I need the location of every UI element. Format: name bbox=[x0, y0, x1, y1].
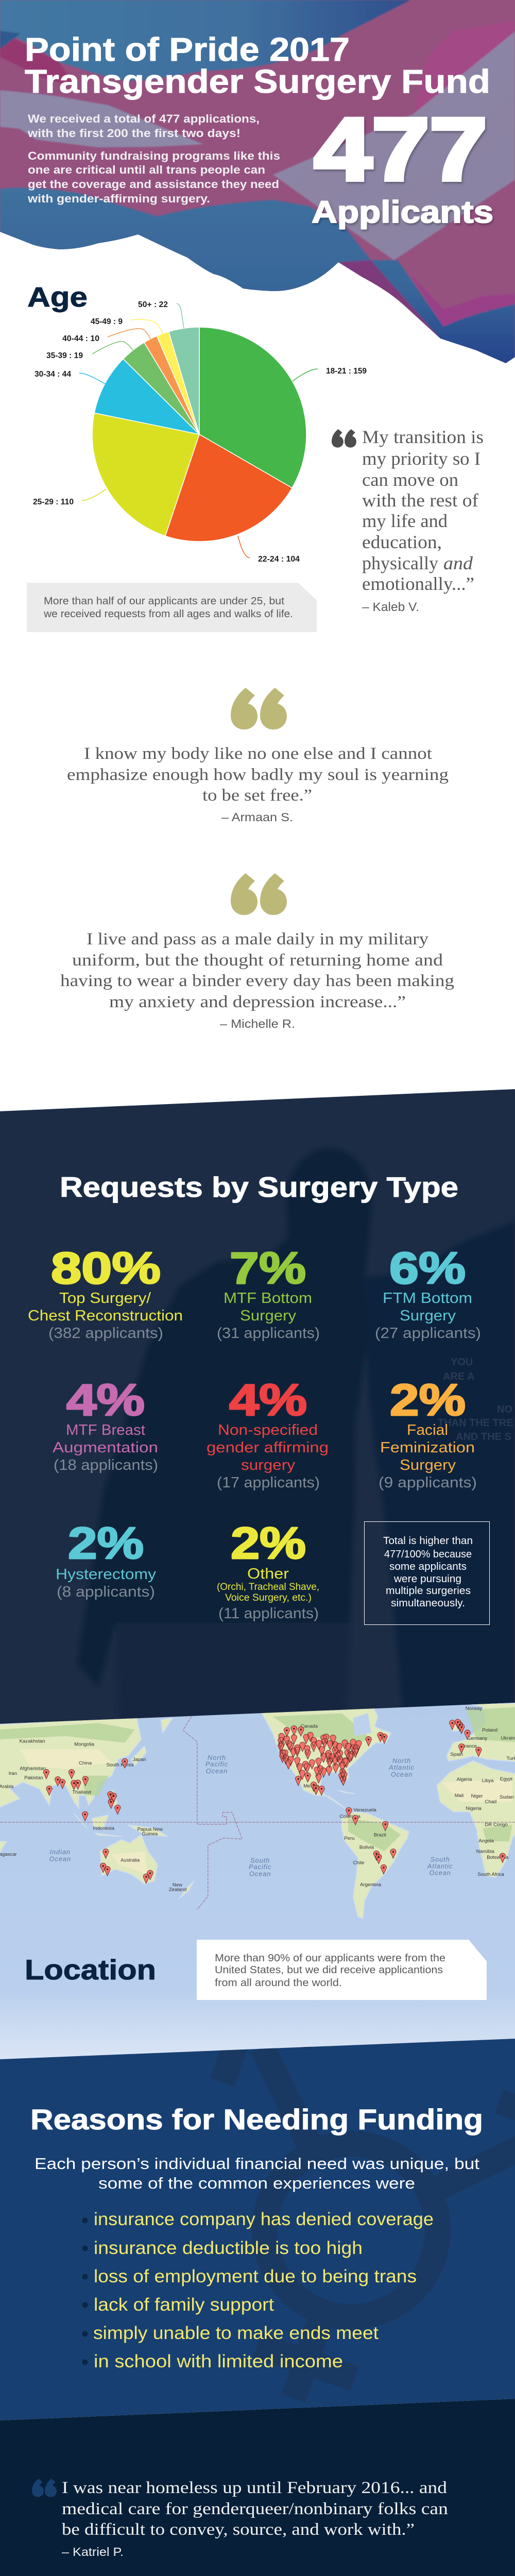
map: applicant locations: Zealand bbox=[169, 1887, 186, 1892]
quote: Katriel P.: I was near homeless up until February 2016... and bbox=[62, 2479, 448, 2497]
stat: MTF breast augmentation 4% bbox=[53, 1376, 158, 1473]
stat: other 2% bbox=[217, 1519, 319, 1622]
quote: Kaleb V.: physically bbox=[362, 553, 438, 573]
quote: Kaleb V. bbox=[362, 427, 484, 614]
list: reasons: in school with limited income bbox=[94, 2351, 343, 2371]
map: applicant locations: Algeria bbox=[457, 1777, 472, 1783]
map: applicant locations: Chile bbox=[353, 1860, 364, 1866]
callout: total note: multiple surgeries bbox=[386, 1585, 471, 1597]
icon: quote mark tan bbox=[231, 873, 287, 915]
list: reasons: lack of family support bbox=[94, 2295, 274, 2315]
stat: MTF breast augmentation 4%: (18 applicants) bbox=[54, 1457, 158, 1473]
stat: hysterectomy 2% bbox=[56, 1519, 157, 1600]
map: applicant locations: Pacific bbox=[249, 1863, 271, 1871]
pie chart: age distribution bbox=[33, 300, 367, 564]
quote: Kaleb V.: can move on bbox=[362, 469, 458, 490]
map: applicant locations: Japan bbox=[133, 1757, 146, 1762]
quote: Katriel P.: – Katriel P. bbox=[62, 2545, 124, 2558]
quote: Kaleb V.: emotionally...” bbox=[362, 573, 474, 594]
map: applicant locations: South bbox=[431, 1856, 450, 1863]
intro text: We received a total of 477 applications, bbox=[28, 112, 260, 125]
stat: MTF bottom surgery 7%: Surgery bbox=[240, 1308, 297, 1324]
map: applicant locations: Indian bbox=[49, 1848, 71, 1856]
map: applicant locations: South Africa bbox=[477, 1872, 505, 1877]
pie chart: age distribution: 40-44 : 10 bbox=[62, 334, 99, 343]
t-shirt print: AND THE S bbox=[456, 1431, 511, 1443]
map: applicant locations: North bbox=[392, 1757, 411, 1765]
stat: facial feminization surgery 2% bbox=[379, 1376, 477, 1491]
map: applicant locations: Germany bbox=[467, 1736, 487, 1741]
stat: MTF breast augmentation 4%: Augmentation bbox=[53, 1439, 158, 1456]
map: applicant locations: Mali bbox=[455, 1793, 464, 1799]
quote: Michelle R.: – Michelle R. bbox=[220, 1017, 295, 1030]
map: applicant locations: Pacific bbox=[205, 1760, 228, 1768]
heading: reasons for needing funding: Reasons for Needing Funding bbox=[30, 2103, 483, 2136]
stat: non-specified surgery 4%: gender affirming bbox=[207, 1439, 329, 1456]
map: applicant locations: Sudan bbox=[500, 1794, 514, 1800]
map: applicant locations: Pakistan bbox=[24, 1775, 43, 1781]
stat: FTM bottom surgery 6%: (27 applicants) bbox=[375, 1325, 481, 1342]
stat: FTM bottom surgery 6%: 6% bbox=[389, 1244, 466, 1293]
stat: hysterectomy 2%: Hysterectomy bbox=[56, 1566, 157, 1583]
map: applicant locations: Mongolia bbox=[74, 1741, 95, 1747]
stat: facial feminization surgery 2%: 2% bbox=[390, 1376, 466, 1425]
title: Transgender Surgery Fund bbox=[25, 63, 490, 100]
map: applicant locations: Peru bbox=[344, 1836, 355, 1841]
map: applicant locations: Poland bbox=[482, 1727, 497, 1733]
callout: age note: More than half of our applicants are under 25, but bbox=[44, 596, 284, 607]
quote: Michelle R.: uniform, but the thought of returning home and bbox=[72, 951, 443, 970]
t-shirt print bbox=[438, 1357, 513, 1443]
map: applicant locations: Guinea bbox=[142, 1832, 158, 1837]
quote: Katriel P. bbox=[62, 2479, 448, 2558]
map: applicant locations: Norway bbox=[466, 1706, 482, 1711]
map: applicant locations: South Korea bbox=[107, 1762, 134, 1768]
panel background: testimonials dark bbox=[0, 2399, 515, 2576]
intro text: with gender-affirming surgery. bbox=[27, 192, 210, 205]
text: reasons intro: some of the common experiences were bbox=[98, 2174, 415, 2192]
callout: total note: Total is higher than bbox=[383, 1535, 473, 1547]
list: reasons: insurance deductible is too high bbox=[94, 2238, 363, 2258]
t-shirt print: NO bbox=[497, 1404, 512, 1415]
pie chart: age distribution: 35-39 : 19 bbox=[46, 351, 83, 360]
map: applicant locations bbox=[0, 1700, 515, 2061]
map: applicant locations: China bbox=[79, 1760, 92, 1766]
callout: location note: United States, but we did receive applicantions bbox=[215, 1964, 443, 1976]
pie chart: age distribution: 22-24 : 104 bbox=[258, 555, 300, 564]
big number: 477 applicants: Applicants bbox=[312, 195, 493, 229]
stat: facial feminization surgery 2%: Feminization bbox=[380, 1439, 475, 1456]
intro text: get the coverage and assistance they need bbox=[28, 178, 279, 191]
quote: Armaan S.: – Armaan S. bbox=[221, 810, 293, 824]
title bbox=[25, 31, 490, 100]
quote: Armaan S.: I know my body like no one else and I cannot bbox=[84, 744, 432, 763]
icon: quote mark tan bbox=[231, 688, 287, 730]
map: applicant locations: Atlantic bbox=[427, 1862, 453, 1870]
quote: Katriel P.: medical care for genderqueer/nonbinary folks can bbox=[62, 2500, 448, 2518]
callout: location note bbox=[197, 1940, 487, 2000]
stat: non-specified surgery 4%: 4% bbox=[229, 1376, 307, 1425]
stat: other 2%: 2% bbox=[231, 1519, 306, 1568]
list: reasons: loss of employment due to being trans bbox=[94, 2266, 417, 2286]
pie chart: age distribution: 50+ : 22 bbox=[138, 300, 168, 309]
list: reasons: simply unable to make ends meet bbox=[93, 2323, 379, 2343]
map: applicant locations: Ocean bbox=[391, 1770, 413, 1778]
title: Point of Pride 2017 bbox=[25, 31, 350, 68]
map: applicant locations: Ocean bbox=[429, 1869, 451, 1877]
callout: location note: More than 90% of our applicants were from the bbox=[215, 1953, 445, 1964]
map: applicant locations: Kazakhstan bbox=[20, 1739, 45, 1744]
quote: Michelle R.: I live and pass as a male daily in my military bbox=[87, 930, 429, 948]
stat: MTF bottom surgery 7%: (31 applicants) bbox=[217, 1325, 320, 1342]
map: applicant locations: Egypt bbox=[500, 1776, 512, 1782]
callout: total note: 477/100% because bbox=[384, 1549, 472, 1560]
stat: non-specified surgery 4%: Non-specified bbox=[218, 1422, 318, 1438]
map: applicant locations: Spain bbox=[450, 1752, 463, 1757]
map: applicant locations: Libya bbox=[482, 1778, 494, 1784]
panel background: reasons for needing funding bbox=[0, 2039, 515, 2420]
map: applicant locations: New bbox=[173, 1882, 182, 1888]
quote: Kaleb V.: – Kaleb V. bbox=[362, 600, 419, 614]
stat: top surgery 80%: (382 applicants) bbox=[48, 1325, 163, 1342]
stat: MTF bottom surgery 7%: 7% bbox=[230, 1244, 306, 1293]
icon: quote mark blue bbox=[32, 2479, 57, 2497]
stat: hysterectomy 2%: (8 applicants) bbox=[57, 1584, 155, 1600]
stat: top surgery 80%: 80% bbox=[51, 1244, 161, 1293]
panel background: requests by surgery type bbox=[0, 1089, 515, 1731]
quote: Kaleb V.: with the rest of bbox=[362, 490, 478, 511]
stat: facial feminization surgery 2%: Facial bbox=[407, 1422, 448, 1438]
map: applicant locations: DR Congo bbox=[485, 1822, 508, 1828]
stat: other 2%: Voice Surgery, etc.) bbox=[225, 1592, 312, 1603]
callout: age note: we received requests from all ages and walks of life. bbox=[43, 608, 293, 620]
t-shirt print: ARE A bbox=[443, 1371, 474, 1382]
map: applicant locations: Ocean bbox=[49, 1855, 71, 1862]
quote: Michelle R.: my anxiety and depression increase...” bbox=[109, 993, 406, 1011]
intro text: Community fundraising programs like this bbox=[28, 149, 280, 162]
map: applicant locations: North bbox=[208, 1754, 226, 1761]
big number: 477 applicants: 477 bbox=[314, 100, 487, 199]
hero flag background bbox=[0, 0, 515, 371]
quote: Michelle R.: having to wear a binder every day has been making bbox=[60, 972, 454, 990]
map: applicant locations: Atlantic bbox=[388, 1764, 415, 1771]
stat: FTM bottom surgery 6% bbox=[375, 1244, 481, 1342]
stat: MTF bottom surgery 7% bbox=[217, 1244, 320, 1342]
map: applicant locations: Colombia bbox=[339, 1814, 361, 1820]
intro text bbox=[27, 112, 280, 205]
map: applicant locations: Venezuela bbox=[353, 1807, 377, 1813]
map: applicant locations: Brazil bbox=[374, 1832, 386, 1838]
quote: Katriel P.: be difficult to convey, source, and work with.” bbox=[62, 2520, 415, 2539]
map: applicant locations: Niger bbox=[471, 1793, 483, 1799]
stat: FTM bottom surgery 6%: Surgery bbox=[400, 1308, 456, 1324]
quote: Armaan S. bbox=[67, 744, 449, 824]
text: reasons intro bbox=[35, 2155, 479, 2192]
heading: Location: Location bbox=[25, 1954, 156, 1986]
quote: Armaan S.: to be set free.” bbox=[202, 786, 312, 805]
callout: total note bbox=[365, 1522, 489, 1625]
intro text: one are critical until all trans people can bbox=[28, 163, 265, 176]
map: applicant locations: Iran bbox=[9, 1771, 17, 1776]
map: applicant locations: Botswana bbox=[487, 1855, 509, 1860]
map: applicant locations: Argentina bbox=[360, 1882, 382, 1888]
map: applicant locations: Thailand bbox=[72, 1790, 91, 1795]
stat: non-specified surgery 4%: (17 applicants) bbox=[217, 1475, 320, 1491]
stat: MTF breast augmentation 4%: MTF Breast bbox=[66, 1422, 145, 1438]
map: applicant locations: South bbox=[250, 1856, 270, 1864]
map: applicant locations: Australia bbox=[121, 1858, 140, 1863]
icon: quote mark grey bbox=[332, 429, 356, 448]
heading: requests by surgery type: Requests by Surgery Type bbox=[60, 1171, 458, 1203]
stat: non-specified surgery 4%: surgery bbox=[241, 1457, 296, 1473]
callout: total note: simultaneously. bbox=[391, 1598, 465, 1609]
map: applicant locations: Papua New bbox=[138, 1827, 163, 1833]
text: reasons intro: Each person’s individual financial need was unique, but bbox=[35, 2155, 479, 2173]
map: applicant locations: Indonesia bbox=[93, 1826, 115, 1832]
stat: top surgery 80%: Chest Reconstruction bbox=[28, 1308, 183, 1324]
quote: Kaleb V.: and bbox=[443, 553, 473, 573]
map: applicant locations: Chad bbox=[485, 1799, 496, 1805]
stat: other 2%: Other bbox=[247, 1566, 289, 1582]
stat: non-specified surgery 4% bbox=[207, 1376, 329, 1491]
list: reasons bbox=[82, 2209, 434, 2371]
quote: Kaleb V.: education, bbox=[362, 532, 442, 552]
heading: Age: Age bbox=[27, 282, 88, 313]
map: applicant locations: Mexico bbox=[303, 1783, 319, 1789]
t-shirt print: YOU bbox=[451, 1357, 473, 1368]
map: applicant locations: Namibia bbox=[476, 1849, 495, 1854]
map: applicant locations: Angola bbox=[478, 1838, 494, 1844]
pie chart: age distribution: 18-21 : 159 bbox=[326, 367, 367, 376]
pie chart: age distribution: 45-49 : 9 bbox=[91, 317, 123, 326]
stat: MTF bottom surgery 7%: MTF Bottom bbox=[224, 1290, 312, 1307]
stat: top surgery 80% bbox=[28, 1244, 183, 1342]
stat: FTM bottom surgery 6%: FTM Bottom bbox=[383, 1290, 472, 1307]
quote: Kaleb V.: my life and bbox=[362, 511, 448, 531]
intro text: with the first 200 the first two days! bbox=[27, 127, 241, 140]
stat: facial feminization surgery 2%: Surgery bbox=[400, 1457, 456, 1473]
quote: Michelle R. bbox=[60, 930, 454, 1030]
callout: location note: from all around the world. bbox=[215, 1977, 342, 1989]
stat: hysterectomy 2%: 2% bbox=[68, 1519, 144, 1568]
list: reasons: insurance company has denied coverage bbox=[94, 2209, 434, 2229]
map: applicant locations: Afghanistan bbox=[20, 1766, 46, 1772]
callout: age note bbox=[27, 583, 317, 632]
map: applicant locations: France bbox=[461, 1743, 477, 1749]
map: applicant locations: Bolivia bbox=[359, 1845, 374, 1851]
map: applicant locations: Ocean bbox=[249, 1870, 271, 1878]
map: applicant locations: Nigeria bbox=[466, 1806, 482, 1811]
map: applicant locations: Ocean bbox=[206, 1767, 228, 1775]
callout: total note: some applicants bbox=[389, 1561, 467, 1572]
stat: MTF breast augmentation 4%: 4% bbox=[66, 1376, 145, 1425]
big number: 477 applicants bbox=[312, 100, 493, 229]
pie chart: age distribution: 25-29 : 110 bbox=[33, 498, 74, 506]
stat: top surgery 80%: Top Surgery/ bbox=[59, 1290, 151, 1307]
map: applicant locations: Canada bbox=[301, 1723, 318, 1729]
stat: facial feminization surgery 2%: (9 applicants) bbox=[379, 1475, 477, 1491]
stat: other 2%: (11 applicants) bbox=[218, 1605, 319, 1622]
t-shirt print: THAN THE TRE bbox=[438, 1417, 513, 1429]
quote: Kaleb V.: my priority so I bbox=[362, 448, 480, 469]
stat: other 2%: (Orchi, Tracheal Shave, bbox=[217, 1582, 319, 1592]
pie chart: age distribution: 30-34 : 44 bbox=[35, 370, 71, 379]
quote: Kaleb V.: My transition is bbox=[362, 427, 484, 447]
callout: total note: were pursuing bbox=[393, 1573, 461, 1585]
quote: Armaan S.: emphasize enough how badly my soul is yearning bbox=[67, 766, 449, 784]
